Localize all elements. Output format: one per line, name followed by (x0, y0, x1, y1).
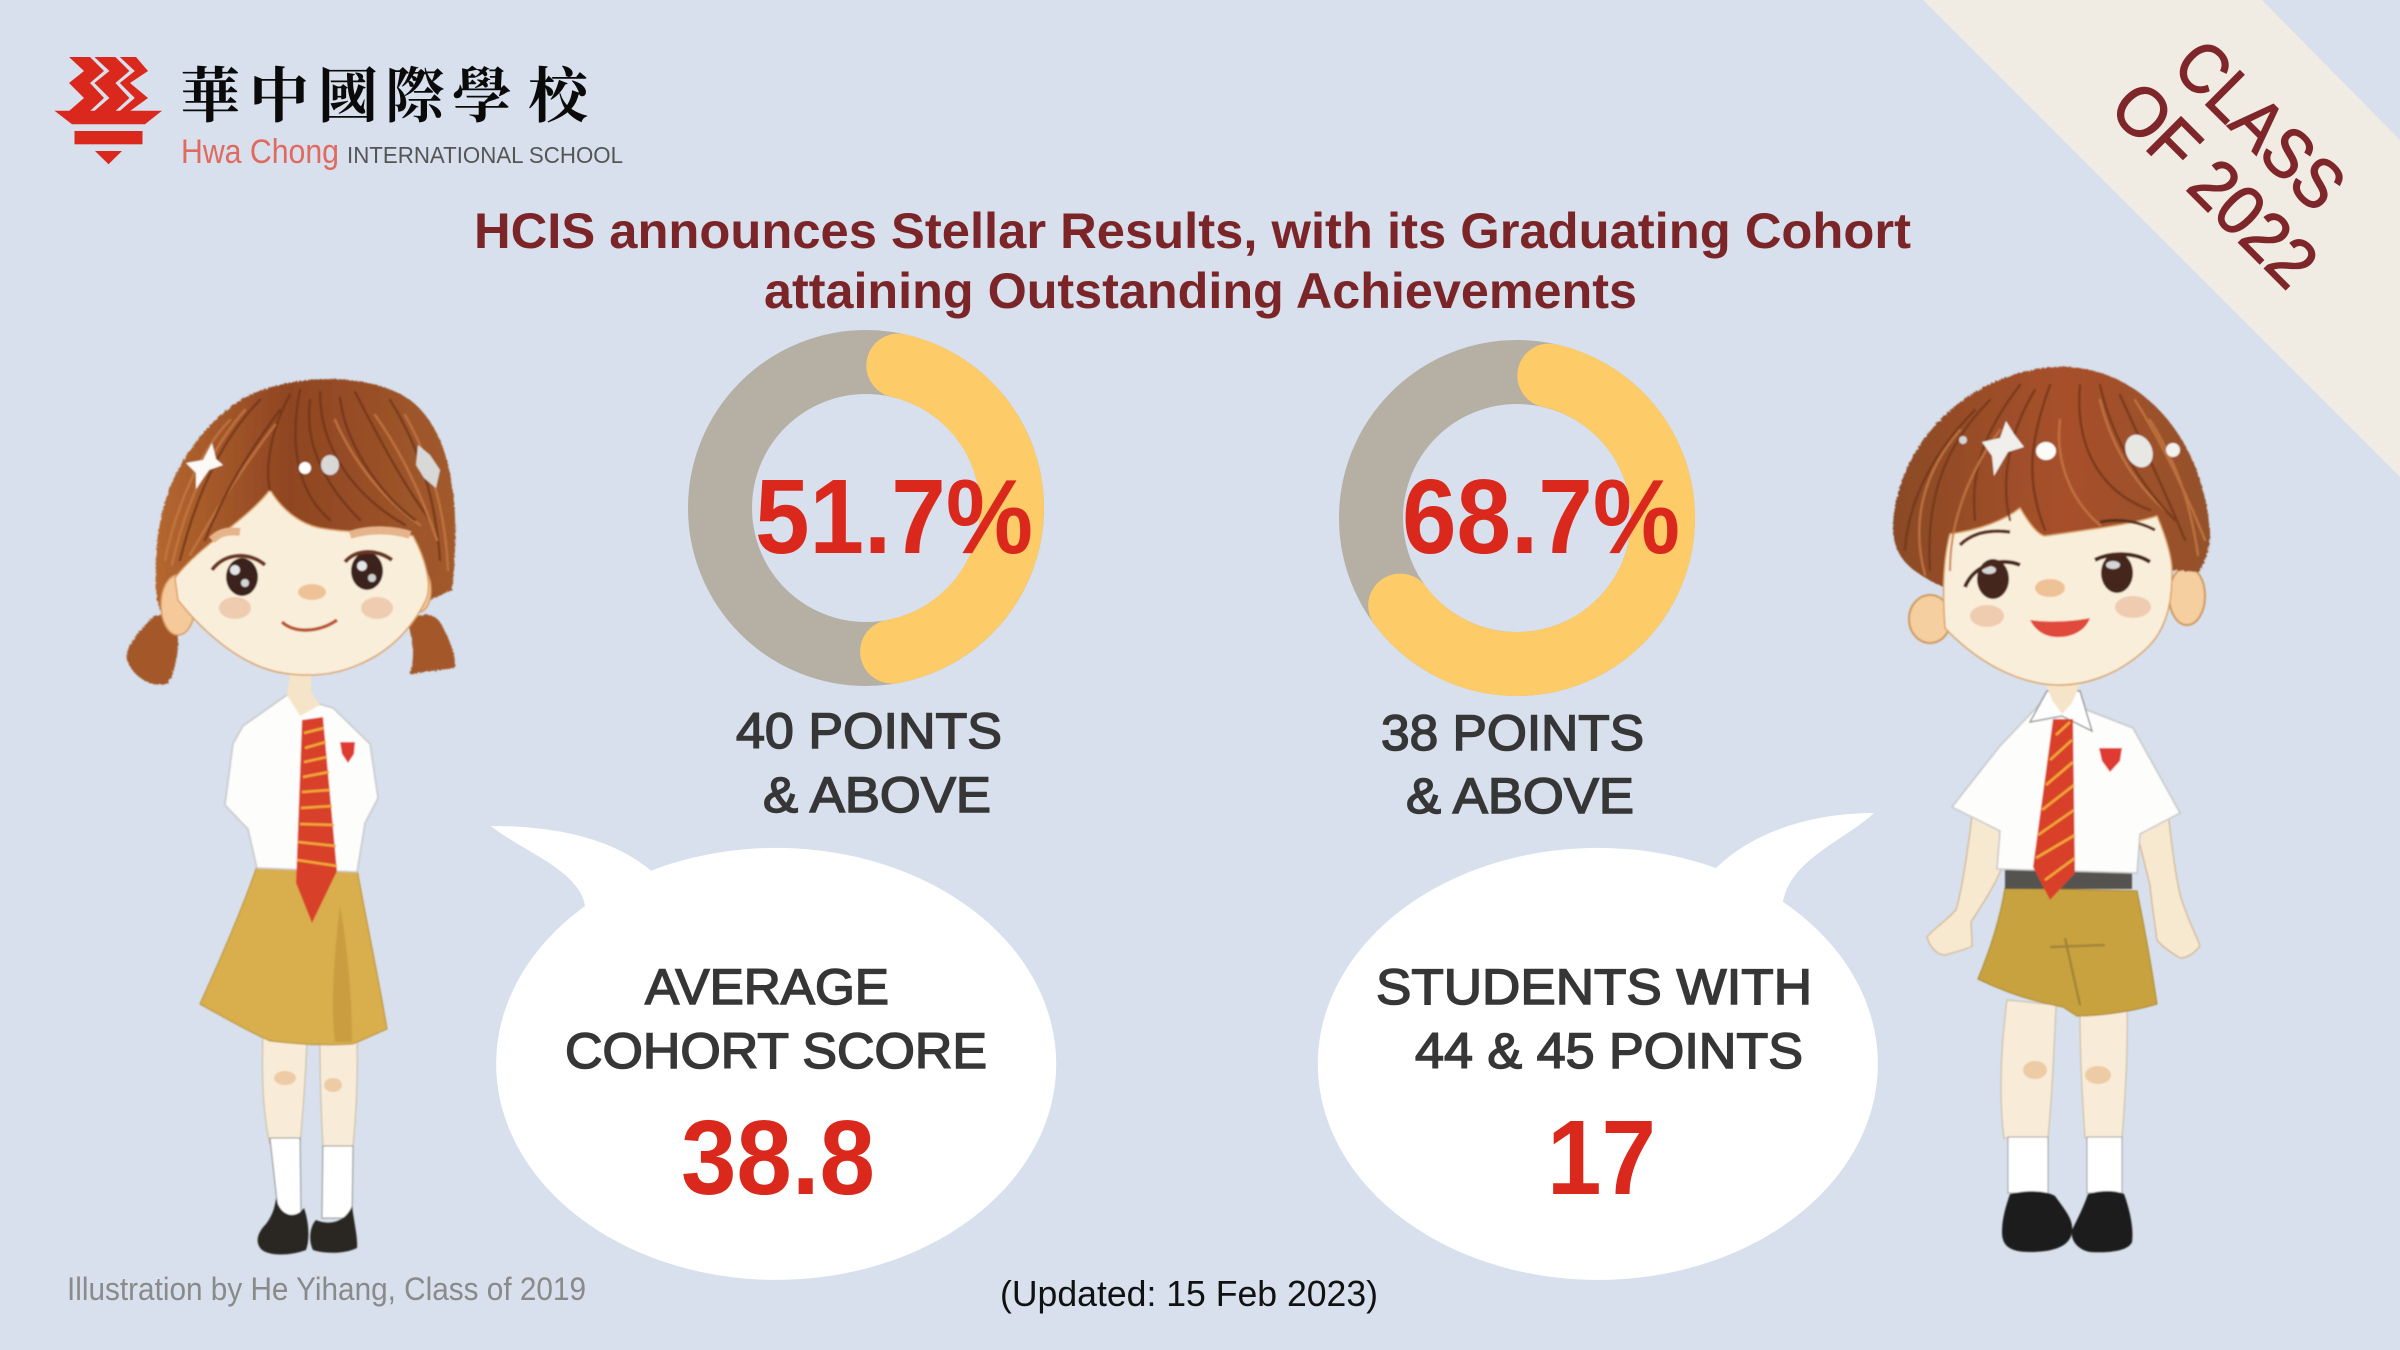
title: HCIS announces Stellar Results, with its Graduating Cohort (474, 203, 1911, 259)
boy hair highlights (1959, 421, 2180, 476)
donut chart: 68.7%: 68.7% (1402, 458, 1680, 576)
label: 38 points and above: 38 POINTS (1381, 705, 1644, 761)
corner ribbon: class of 2022 (1923, 0, 2400, 477)
girl hair strands (165, 390, 448, 570)
label: 38 points and above (1381, 705, 1644, 824)
boy shorts (1978, 888, 2157, 1016)
girl shirt (225, 695, 378, 872)
logo English name (181, 133, 623, 171)
girl badge (340, 742, 355, 763)
boy tie (2033, 719, 2075, 900)
boy hair (1893, 367, 2210, 590)
callout: average cohort score: 38.8 (681, 1099, 875, 1217)
girl legs and socks (263, 1035, 357, 1218)
icon: red flame emblem (54, 57, 162, 164)
logo English name: Hwa Chong (181, 133, 339, 171)
logo Chinese name: 華中國際學校 (180, 63, 593, 130)
illustration credit: Illustration by He Yihang, Class of 2019 (67, 1271, 586, 1307)
boy brows, nose, cheeks and mouth (1960, 520, 2155, 637)
school logo (54, 57, 623, 171)
boy legs and socks (2001, 1000, 2127, 1193)
boy belt (2005, 870, 2132, 889)
girl shoes (258, 1198, 357, 1254)
boy eyes (1965, 553, 2150, 599)
illustration: girl student (127, 379, 455, 1254)
title: attaining Outstanding Achievements (764, 263, 1637, 319)
corner ribbon: class of 2022: OF 2022 (2096, 66, 2333, 303)
girl tie (296, 717, 337, 923)
girl hair (156, 379, 455, 610)
boy collar and neck (2030, 684, 2092, 731)
donut chart: 51.7% (720, 362, 1033, 654)
callout: average cohort score (491, 826, 1056, 1280)
boy shoes (2002, 1191, 2133, 1252)
girl hair highlights (186, 443, 440, 489)
girl ears (161, 568, 431, 635)
boy ears (1909, 567, 2205, 643)
girl neck (287, 668, 320, 716)
boy badge (2099, 748, 2122, 772)
girl skirt (200, 866, 387, 1045)
donut chart: 51.7%: 51.7% (755, 458, 1033, 576)
callout: students with 44 and 45 points (1318, 813, 1878, 1280)
updated date: (Updated: 15 Feb 2023) (1000, 1273, 1378, 1314)
girl brows, nose, cheeks and mouth (212, 530, 410, 630)
callout: students with 44 and 45 points: 44 & 45 POINTS (1415, 1023, 1803, 1079)
callout: average cohort score: COHORT SCORE (565, 1023, 987, 1079)
label: 40 points and above: & ABOVE (763, 767, 991, 823)
illustration: boy student (1893, 367, 2210, 1252)
callout: average cohort score: AVERAGE (645, 959, 889, 1015)
label: 40 points and above (736, 703, 1002, 823)
girl eyes (212, 552, 392, 596)
title (474, 203, 1911, 319)
boy shirt (1952, 704, 2180, 873)
callout: students with 44 and 45 points: 17 (1547, 1099, 1656, 1217)
boy hair strands (1905, 385, 2205, 575)
boy face (1944, 508, 2172, 685)
label: 40 points and above: 40 POINTS (736, 703, 1002, 759)
girl pigtails (127, 611, 455, 685)
boy arms (1927, 808, 2200, 958)
callout: students with 44 and 45 points: STUDENTS WITH (1376, 959, 1812, 1015)
donut chart: 68.7% (1371, 372, 1680, 664)
corner ribbon: class of 2022: CLASS (2159, 24, 2360, 225)
label: 38 points and above: & ABOVE (1406, 768, 1634, 824)
girl skirt fold (333, 905, 352, 1042)
girl face (175, 490, 428, 675)
logo English name: INTERNATIONAL SCHOOL (347, 142, 623, 168)
